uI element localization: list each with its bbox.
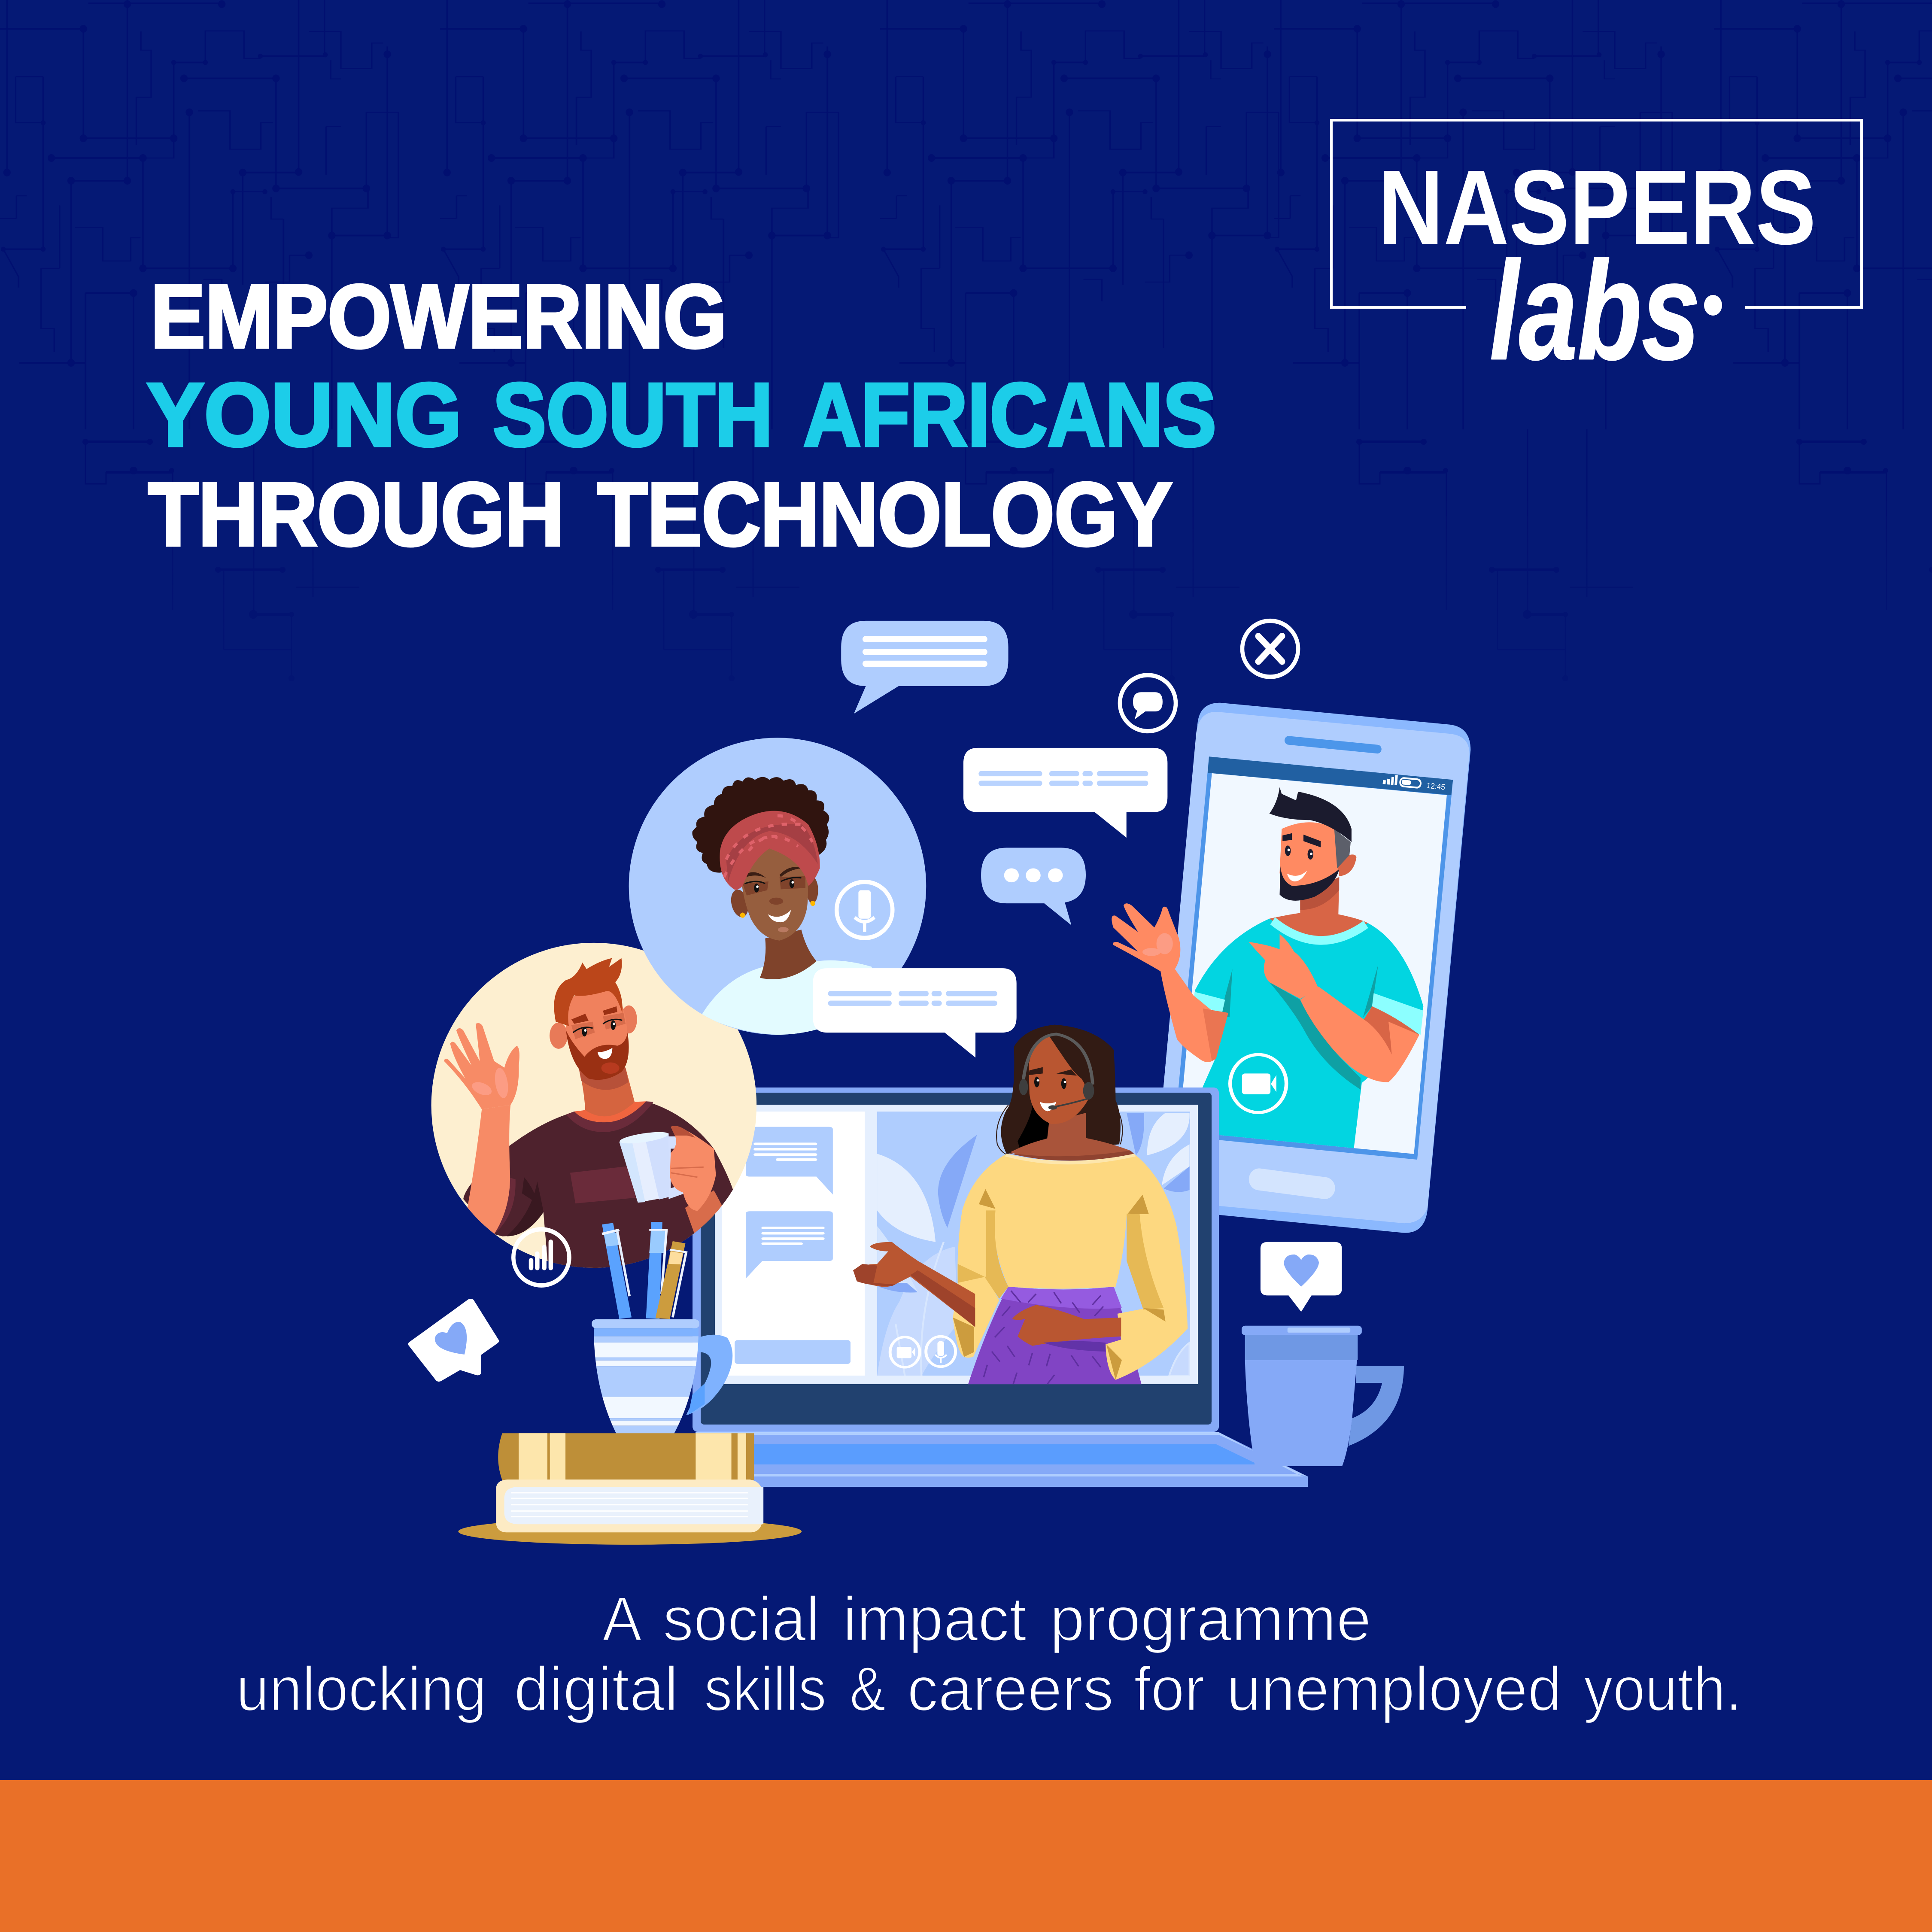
logo wordmark NASPERS: NASPERS (1378, 148, 1816, 267)
hair (1001, 1025, 1121, 1154)
laptop bezel (701, 1093, 1212, 1425)
subtitle line 1: A (602, 1584, 642, 1654)
neck (760, 930, 817, 979)
phone speaker (1289, 740, 1377, 749)
laptop screen and frame (693, 1088, 1219, 1432)
cream circle (431, 943, 756, 1268)
forearm (685, 1190, 724, 1236)
neck (1010, 1113, 1130, 1160)
icon: signal bars (513, 1229, 569, 1285)
woman portrait (692, 777, 829, 979)
title line 3: TECHNOLOGY (598, 465, 1172, 565)
title line 2: AFRICANS (803, 365, 1216, 465)
subtitle line 2: skills (704, 1654, 826, 1724)
phone screen (1174, 756, 1453, 1160)
headband (720, 811, 820, 890)
headset (1019, 1034, 1094, 1110)
title (147, 267, 1216, 565)
logo dot (1704, 295, 1722, 316)
skirt (968, 1287, 1142, 1384)
logo frame (1331, 120, 1862, 307)
man on phone (1183, 787, 1423, 1151)
laptop base (696, 1432, 1308, 1487)
orange footer band (0, 1780, 1932, 1932)
books (458, 1433, 802, 1545)
subtitle line 2 (236, 1654, 1742, 1724)
mug (1242, 1326, 1404, 1466)
man head (550, 958, 637, 1080)
man's pointing arm and waving hand (1112, 903, 1419, 1090)
face (1029, 1036, 1088, 1124)
icon: close (1242, 621, 1298, 677)
subtitle line 2: unlocking (236, 1654, 487, 1724)
icon: microphone (837, 882, 893, 938)
neck (578, 1066, 635, 1117)
bubble: blue circle woman (513, 738, 926, 1285)
top book (498, 1433, 754, 1480)
bubble: white lower (813, 968, 1017, 1057)
pens (602, 1222, 686, 1319)
video call icons (890, 1337, 956, 1367)
shadow (458, 1518, 802, 1545)
status bar: 12:45 (1426, 781, 1446, 792)
hand (670, 1126, 716, 1211)
title line 2 (147, 365, 1216, 465)
laptop chat bubble 1 (746, 1127, 833, 1194)
icon: chat (1120, 675, 1176, 731)
face (741, 848, 808, 941)
pointing arm (1270, 982, 1419, 1082)
laptop chat bubble 2 (746, 1211, 833, 1279)
bubble: white right (963, 748, 1167, 838)
laptop input bar (735, 1340, 851, 1364)
subtitle line 2: digital (514, 1654, 678, 1724)
speech bubbles (813, 621, 1167, 1057)
icon: tilted heart speech bubble (412, 1302, 495, 1379)
icon: heart speech bubble (1261, 1242, 1342, 1312)
subtitle line 1: impact (843, 1584, 1027, 1654)
title line 3 (148, 465, 1172, 565)
shirt (463, 1101, 736, 1285)
white shirt (702, 960, 872, 1035)
bubble: cream circle man (431, 943, 756, 1285)
blue circle (629, 738, 926, 1035)
man with mug (444, 1023, 736, 1285)
bubble: three dots (981, 848, 1086, 925)
phone home button (1259, 1179, 1325, 1188)
video panel (877, 1112, 1190, 1376)
person: woman on laptop (853, 1025, 1188, 1384)
laptop rim (693, 1088, 1219, 1432)
phone (1146, 703, 1470, 1233)
laptop display (715, 1105, 1198, 1384)
chat panel (722, 1112, 865, 1376)
neck (1270, 877, 1368, 936)
subtitle line 2: & (850, 1654, 886, 1724)
subtitle line 1: programme (1050, 1584, 1371, 1654)
mug in hand (619, 1130, 687, 1203)
sweater right sleeve (1106, 1154, 1188, 1380)
subtitle (236, 1584, 1742, 1724)
cup handle (686, 1335, 732, 1415)
cup body (592, 1328, 703, 1435)
sweater body and left sleeve (953, 1154, 1151, 1358)
afro hair (692, 777, 829, 873)
pen cup (412, 1222, 802, 1545)
title line 1: EMPOWERING (151, 267, 727, 367)
head (1279, 822, 1339, 886)
left arm (468, 1105, 510, 1234)
right mug and heart (1230, 1054, 1404, 1466)
sleeves (1372, 993, 1423, 1035)
phone body (1146, 703, 1470, 1233)
subtitle line 2: careers (907, 1654, 1114, 1724)
subtitle line 2: unemployed (1227, 1654, 1562, 1724)
chat messages in laptop (735, 1127, 851, 1364)
subtitle line 2: for (1134, 1654, 1205, 1724)
status bar (1382, 774, 1446, 792)
arm and hands (853, 1242, 975, 1327)
bottom book (496, 1479, 762, 1532)
title line 2: SOUTH (493, 365, 773, 465)
keyboard (696, 1444, 1258, 1464)
bubble: top blue (841, 621, 1009, 714)
logo: Naspers Labs (1331, 120, 1862, 389)
title line 3: THROUGH (148, 465, 564, 565)
subtitle line 2: youth. (1584, 1654, 1742, 1724)
cup rim (592, 1319, 699, 1328)
waving arm (1112, 903, 1220, 1062)
title line 2: YOUNG (147, 365, 462, 465)
t-shirt (1183, 919, 1423, 1151)
floating icons (1120, 621, 1298, 731)
logo script labs: labs (1490, 233, 1700, 389)
subtitle line 1 (602, 1584, 1371, 1654)
subtitle line 1: social (663, 1584, 820, 1654)
icon: video camera (1230, 1054, 1286, 1112)
